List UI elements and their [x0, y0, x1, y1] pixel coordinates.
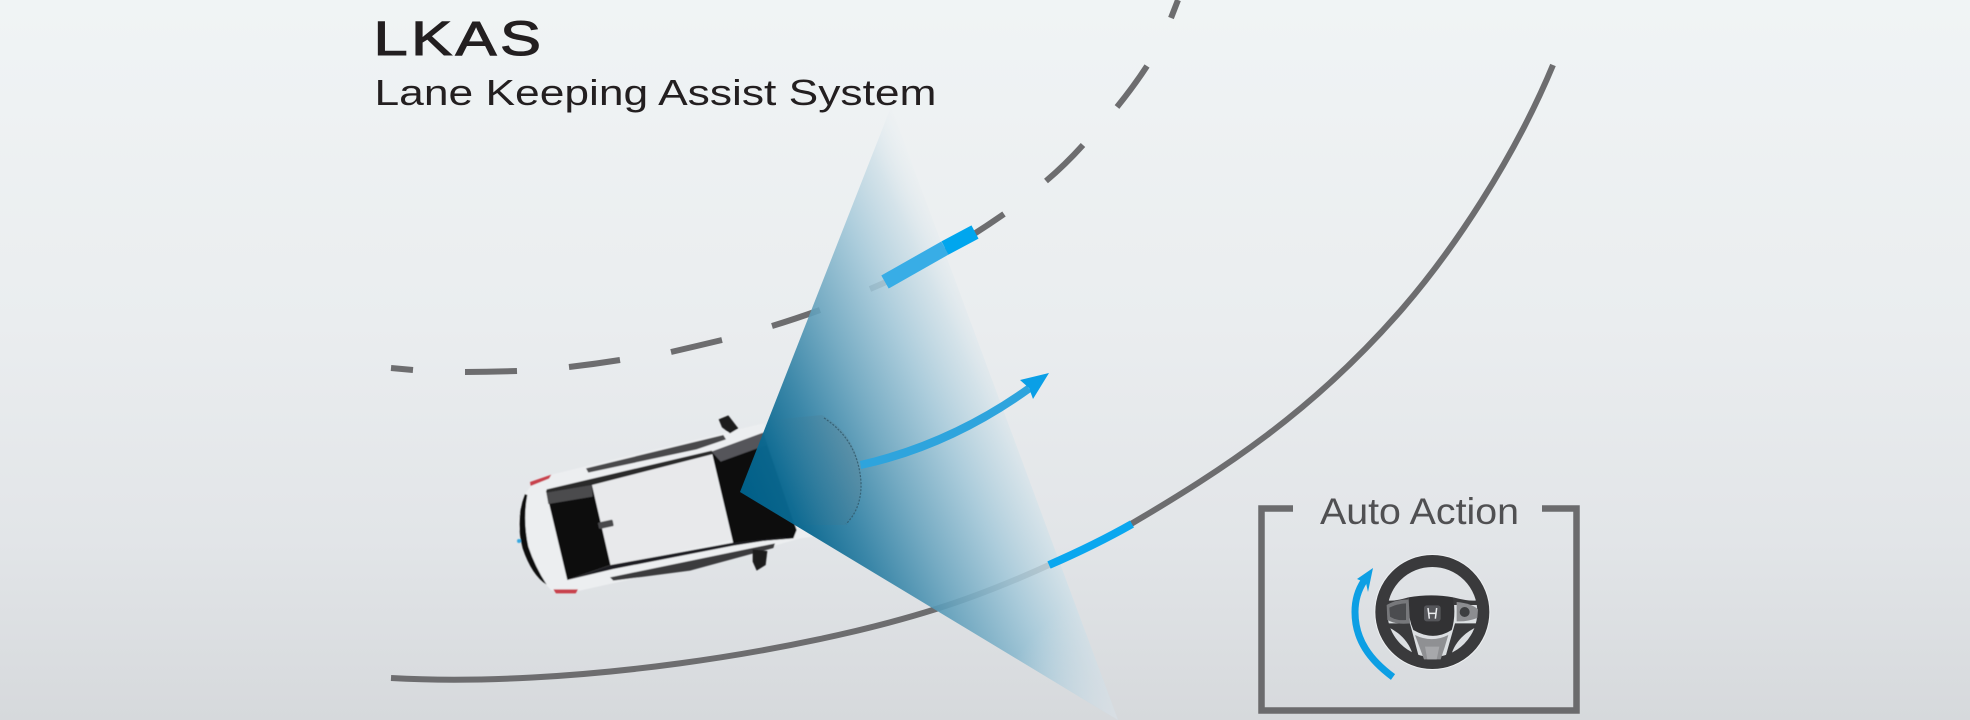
title: LKAS: LKAS	[374, 11, 544, 65]
car body	[517, 423, 813, 591]
car top view	[517, 415, 813, 593]
right switch panel	[1457, 602, 1478, 621]
shark fin	[598, 519, 614, 529]
emblem	[1424, 605, 1441, 621]
windshield	[712, 433, 797, 543]
dashed lane line	[391, 0, 1178, 372]
camera detection cone	[740, 107, 1118, 720]
car hood seen through cone	[770, 415, 861, 525]
heading: Auto Action: Auto Action	[1320, 491, 1519, 532]
lower side strip	[610, 543, 775, 581]
icon: steering wheel	[1375, 555, 1490, 669]
left switch panel	[1387, 599, 1410, 624]
blue lane-detection segment, lower	[1049, 524, 1132, 565]
blue steering correction arrow	[860, 373, 1049, 469]
rear camera dot	[517, 539, 521, 543]
solid lane line	[391, 65, 1553, 680]
rear window	[546, 484, 611, 580]
blue lane-detection segment, upper	[885, 232, 975, 282]
icon: rotation arrow	[1355, 568, 1393, 677]
roof	[592, 453, 732, 566]
subtitle: Lane Keeping Assist System: Lane Keeping Assist System	[374, 72, 936, 113]
frame bracket	[1262, 508, 1576, 710]
lower spoke trim	[1415, 635, 1448, 659]
lower spokes	[1387, 623, 1418, 657]
tail lights	[530, 475, 551, 486]
hub	[1408, 595, 1454, 636]
mirrors	[719, 415, 738, 433]
upper side strip	[586, 435, 726, 473]
upper spoke lips	[1385, 597, 1408, 605]
rear bumper black edge	[519, 494, 547, 585]
panel: auto action	[1262, 491, 1576, 710]
